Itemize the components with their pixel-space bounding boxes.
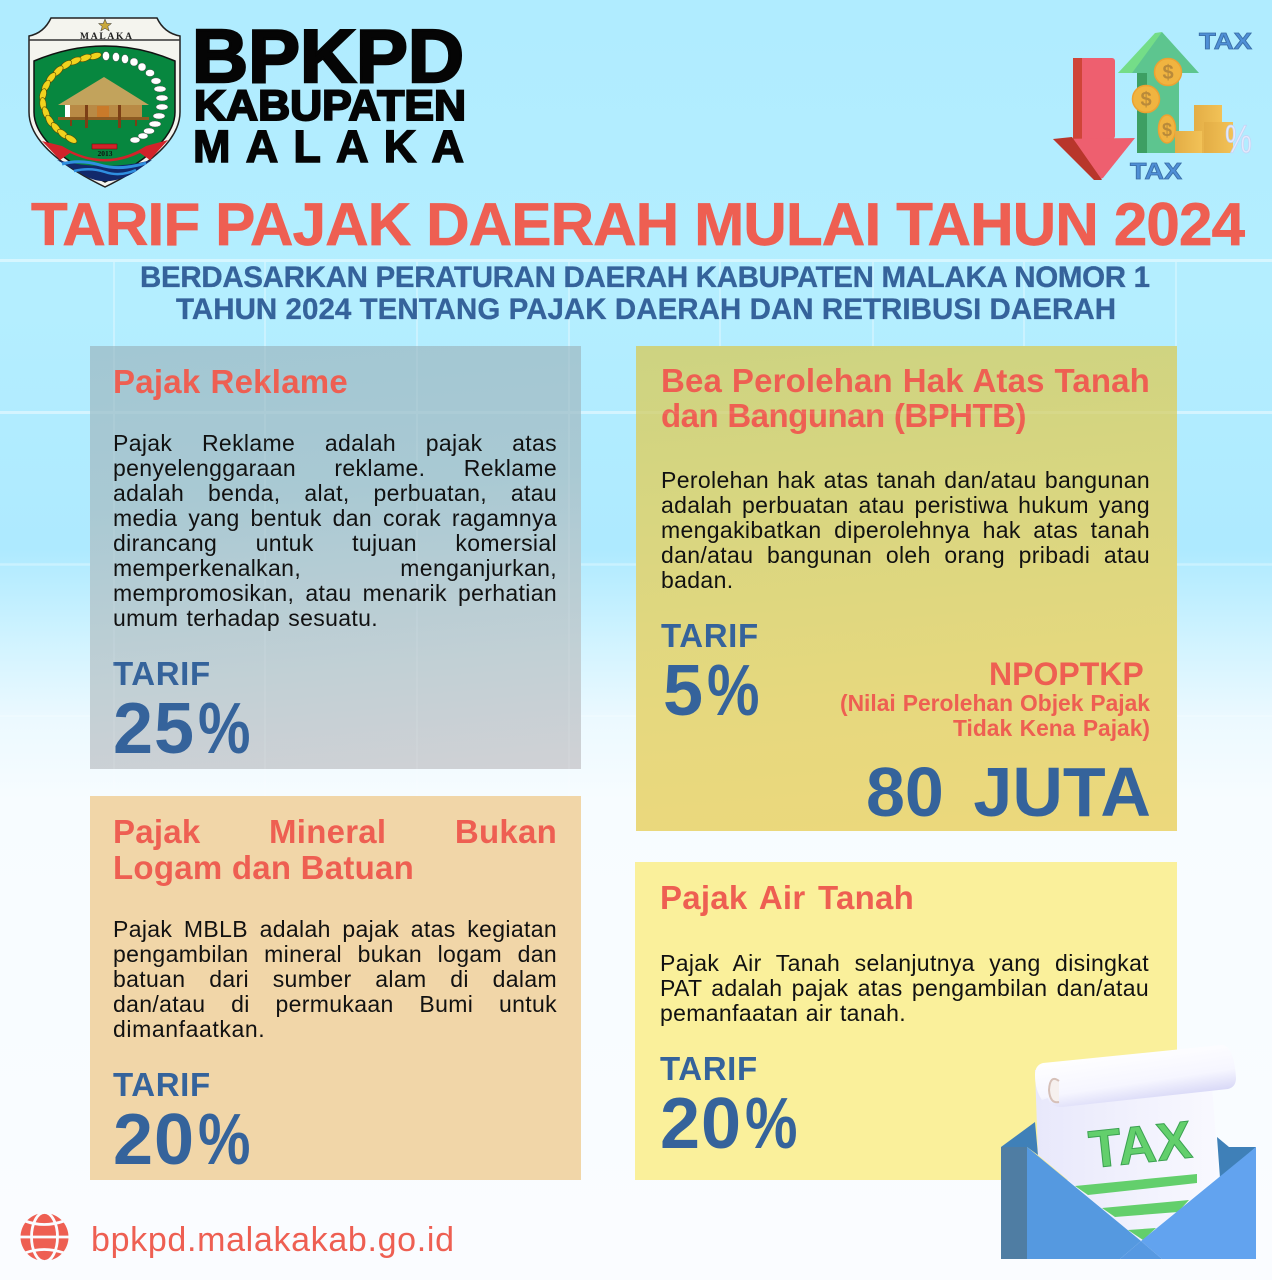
TAX: TAX — [1086, 1110, 1195, 1180]
text block: Pajak MBLB description: batuan dari sumber alam di dalam — [113, 966, 557, 992]
heading: Pajak Reklame: Pajak Reklame — [113, 363, 348, 400]
text block: Pajak Reklame description: penyelenggaraan reklame. Reklame — [113, 455, 557, 481]
text block: BPHTB description: dan/atau bangunan oleh orang pribadi atau — [661, 542, 1150, 568]
tarif label: TARIF — [661, 617, 759, 654]
tarif value 5%: 5 — [663, 651, 704, 731]
green up arrow — [1118, 32, 1199, 153]
panel: Pajak Air Tanah — [635, 862, 1177, 1180]
tarif value 5% — [663, 651, 760, 731]
tarif value 25%: % — [198, 689, 251, 769]
footer: website: bpkpd.malakakab.go.id — [91, 1221, 454, 1259]
tarif value 25%: 25 — [113, 689, 195, 769]
text block: BPHTB description: mengakibatkan diperolehnya hak atas tanah — [661, 517, 1150, 543]
heading: Bea Perolehan Hak Atas Tanah dan Bangunan (BPHTB): dan Bangunan (BPHTB) — [661, 397, 1026, 434]
text block: Pajak MBLB description: dimanfaatkan. — [113, 1016, 265, 1042]
logo: Malaka coat of arms: 2013 — [98, 149, 113, 158]
house — [58, 77, 149, 105]
tarif value 20%: % — [745, 1084, 798, 1164]
text block: Pajak MBLB description: pengambilan mineral bukan logam dan — [113, 941, 557, 967]
subtitle: BERDASARKAN PERATURAN DAERAH KABUPATEN MALAKA NOMOR 1 — [140, 261, 1150, 294]
tarif value 25% — [113, 689, 251, 769]
paper — [1035, 1070, 1219, 1241]
text block: Pajak Air Tanah description — [660, 950, 1149, 1026]
text block: BPHTB description: Perolehan hak atas tanah dan/atau bangunan — [661, 467, 1150, 493]
envelope back — [1001, 1122, 1038, 1155]
tarif value 20%: % — [198, 1100, 251, 1180]
heading: Pajak Mineral Bukan Logam dan Batuan — [113, 813, 557, 886]
ribbon — [42, 140, 168, 162]
coin stacks — [1194, 105, 1222, 153]
panel: Pajak Mineral Bukan Logam dan Batuan — [90, 796, 581, 1180]
NPOPTKP note: (Nilai Perolehan Objek Pajak — [840, 690, 1150, 716]
tarif label: TARIF — [660, 1050, 758, 1087]
tax labels — [1130, 28, 1253, 184]
text block: Pajak Reklame description: memperkenalkan, menganjurkan, — [113, 555, 557, 581]
roll — [1035, 1045, 1236, 1107]
percent: % — [1225, 118, 1252, 162]
panel: Pajak Reklame — [90, 346, 581, 769]
tarif value 20%: 20 — [660, 1084, 742, 1164]
wreath cotton — [102, 52, 168, 143]
logo wordmark: KABUPATEN — [194, 82, 466, 130]
text block: Pajak Reklame description: dirancang untuk tujuan komersial — [113, 530, 557, 556]
icon: tax arrows and coins: $ — [1162, 62, 1174, 84]
NPOPTKP note: Tidak Kena Pajak) — [953, 715, 1150, 741]
green lines — [1075, 1174, 1197, 1195]
heading: Bea Perolehan Hak Atas Tanah dan Bangunan (BPHTB) — [661, 362, 1150, 434]
logo wordmark: MALAKA — [193, 121, 464, 172]
value 80 JUTA: 80 JUTA — [866, 753, 1151, 831]
text block: Pajak Reklame description: adalah benda, alat, perbuatan, atau — [113, 480, 557, 506]
tarif label: TARIF — [113, 655, 211, 692]
logo: Malaka coat of arms: MALAKA — [80, 32, 132, 42]
text block: Pajak Air Tanah description: pemanfaatan air tanah. — [660, 1000, 906, 1026]
text block: Pajak Reklame description: Pajak Reklame adalah pajak atas — [113, 430, 557, 456]
icon: globe — [19, 1212, 70, 1262]
text block: Pajak Reklame description: umum terhadap sesuatu. — [113, 605, 378, 631]
text block: BPHTB description — [661, 467, 1150, 593]
text block: Pajak Air Tanah description: PAT adalah pajak atas pengambilan dan/atau — [660, 975, 1149, 1001]
heading: Bea Perolehan Hak Atas Tanah dan Bangunan (BPHTB): Bea Perolehan Hak Atas Tanah — [661, 362, 1150, 399]
icon: tax arrows and coins: $ — [1140, 89, 1152, 111]
tarif value 20% — [660, 1084, 798, 1164]
text block: Pajak MBLB description: dan/atau di permukaan Bumi untuk — [113, 991, 557, 1017]
text block: Pajak Air Tanah description: Pajak Air Tanah selanjutnya yang disingkat — [660, 950, 1149, 976]
NPOPTKP note — [840, 656, 1150, 741]
waves — [57, 160, 152, 181]
red down arrow — [1073, 58, 1115, 139]
wreath rice — [38, 51, 102, 145]
tarif value 20%: 20 — [113, 1100, 195, 1180]
tarif value 5%: % — [707, 651, 760, 731]
panel: BPHTB — [636, 346, 1177, 831]
text block: Pajak MBLB description: Pajak MBLB adalah pajak atas kegiatan — [113, 916, 557, 942]
text block: BPHTB description: badan. — [661, 567, 733, 593]
icon: tax arrows and coins: $ — [1162, 120, 1172, 140]
heading: Pajak Mineral Bukan Logam dan Batuan: Pajak Mineral Bukan — [113, 813, 557, 850]
text block: Pajak Reklame description — [113, 430, 557, 631]
tarif label: TARIF — [113, 1066, 211, 1103]
subtitle: TAHUN 2024 TENTANG PAJAK DAERAH DAN RETRIBUSI DAERAH — [176, 293, 1116, 326]
tax labels: TAX — [1199, 28, 1253, 54]
tax labels: TAX — [1130, 158, 1183, 184]
text block: Pajak MBLB description — [113, 916, 557, 1042]
text block: Pajak Reklame description: media yang bentuk dan corak ragamnya — [113, 505, 557, 531]
text block: BPHTB description: adalah perbuatan atau peristiwa hukum yang — [661, 492, 1150, 518]
text block: Pajak Reklame description: mempromosikan, atau menarik perhatian — [113, 580, 557, 606]
tarif value 20% — [113, 1100, 251, 1180]
logo wordmark: BPKPD — [192, 14, 464, 98]
heading: Pajak Air Tanah: Pajak Air Tanah — [660, 879, 914, 916]
heading: Pajak Mineral Bukan Logam dan Batuan: Logam dan Batuan — [113, 849, 414, 886]
title: TARIF PAJAK DAERAH MULAI TAHUN 2024 — [31, 191, 1246, 258]
coins — [1132, 58, 1182, 143]
NPOPTKP note: NPOPTKP — [989, 656, 1144, 692]
envelope front — [1001, 1147, 1141, 1259]
